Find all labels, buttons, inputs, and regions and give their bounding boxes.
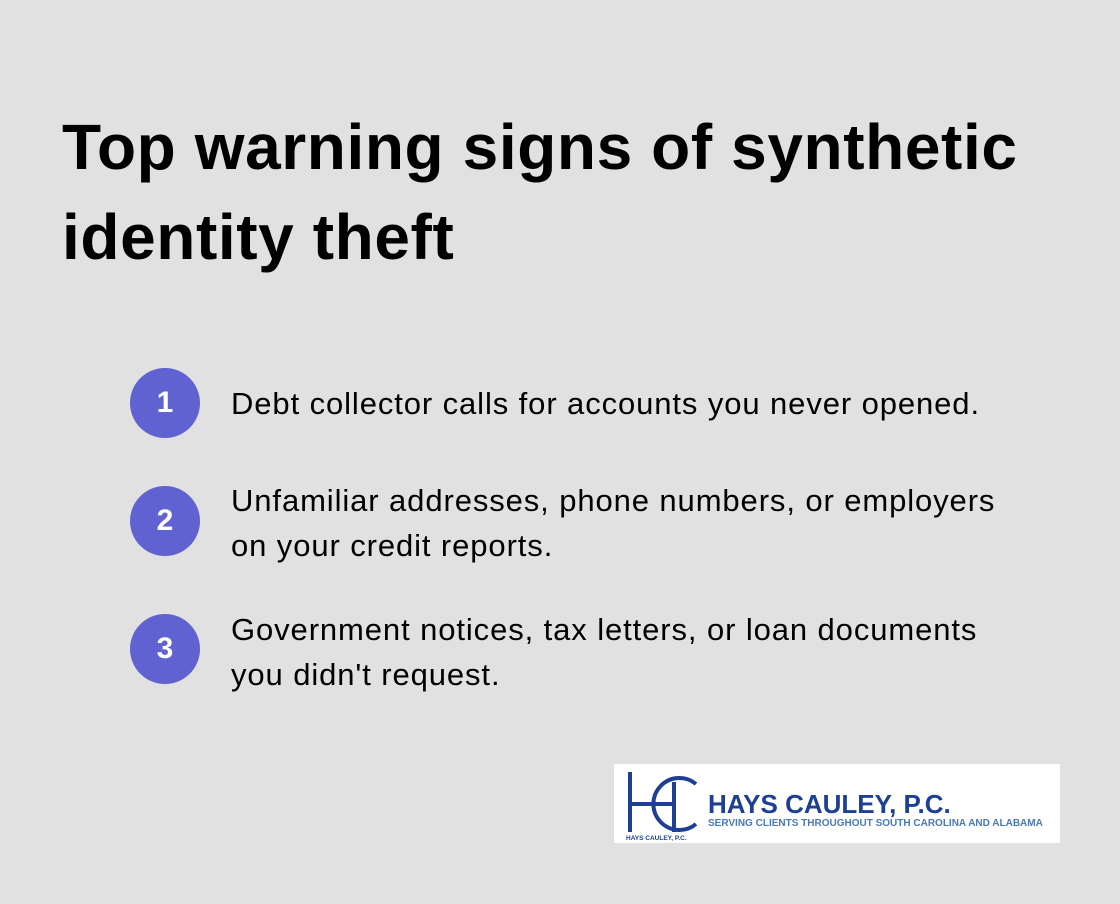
text 3: Government notices, tax letters, or loan documents you didn't request. <box>231 612 977 692</box>
item 2 <box>130 483 995 563</box>
logo <box>614 764 1060 843</box>
badge 3: 3 <box>157 632 173 665</box>
badge 2: 2 <box>157 504 173 537</box>
text 2: Unfamiliar addresses, phone numbers, or employers on your credit reports. <box>231 483 995 563</box>
badge 1 <box>130 368 200 438</box>
item 1 <box>130 368 980 438</box>
logo mark <box>628 772 698 832</box>
badge 1: 1 <box>157 386 173 419</box>
badge 2 <box>130 486 200 556</box>
title: Top warning signs of synthetic identity theft <box>62 111 1018 273</box>
item 3 <box>130 612 977 692</box>
logo name: HAYS CAULEY, P.C. <box>708 789 951 819</box>
logo tagline: SERVING CLIENTS THROUGHOUT SOUTH CAROLINA AND ALABAMA <box>708 818 1043 829</box>
logo small caption: HAYS CAULEY, P.C. <box>626 835 687 842</box>
text 1: Debt collector calls for accounts you never opened. <box>231 386 980 421</box>
badge 3 <box>130 614 200 684</box>
